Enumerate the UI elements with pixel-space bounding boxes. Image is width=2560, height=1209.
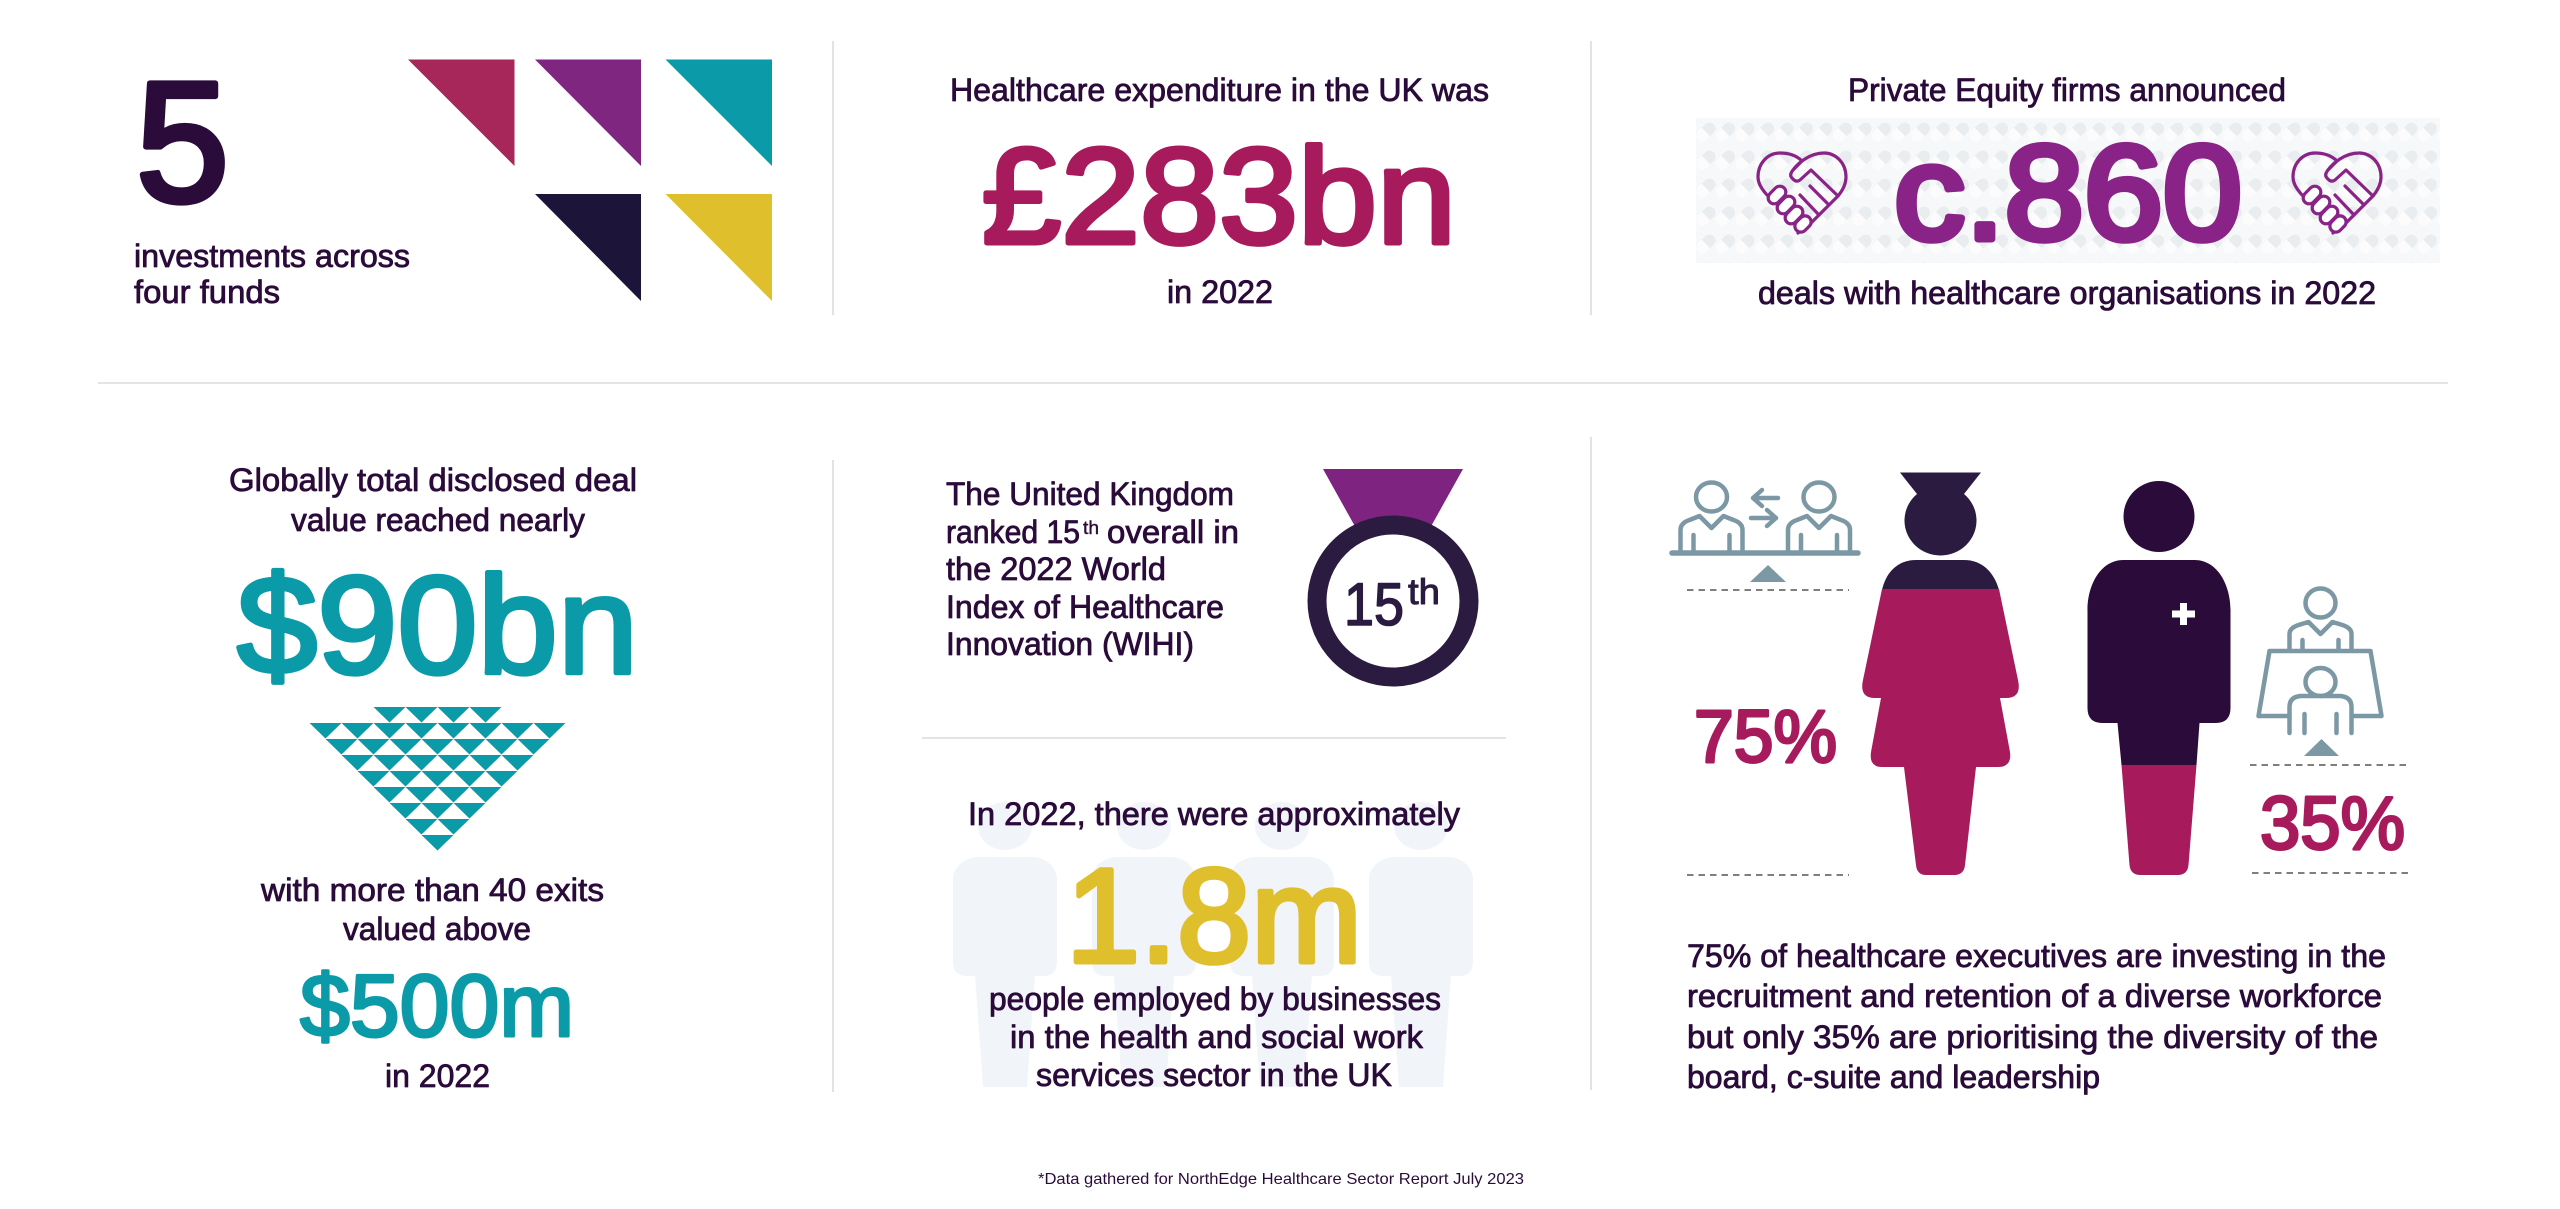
icon: left handshake heart	[1758, 153, 1846, 235]
icon: female figure	[1862, 472, 2019, 875]
icon: balance pointer right	[2304, 739, 2339, 756]
text: investments across four funds: four funds	[134, 274, 280, 310]
text: investments across four funds: investments across	[134, 238, 410, 274]
text: globally intro	[229, 462, 637, 538]
panel: WIHI ranking	[946, 469, 1469, 677]
text: people employed: people employed by businesses	[989, 981, 1441, 1017]
text: diversity paragraph: but only 35% are prioritising the diversity of the	[1687, 1019, 2378, 1055]
stat: £283bn: £283bn	[982, 120, 1456, 272]
icon: medal	[1317, 469, 1469, 677]
icon: background people silhouettes	[953, 802, 1473, 1087]
text: in 2022: in 2022	[385, 1058, 490, 1094]
footnote: *Data gathered for NorthEdge Healthcare Sector Report July 2023	[1038, 1171, 1524, 1188]
icon: medal: 15	[1344, 571, 1404, 638]
stat: $500m: $500m	[300, 956, 574, 1055]
text: UK ranking: The United Kingdom	[946, 476, 1234, 512]
text: deals with healthcare organisations: deals with healthcare organisations in 2022	[1758, 275, 2376, 311]
text: people employed: in the health and social work	[1010, 1019, 1424, 1055]
text: more than 40 exits	[260, 872, 604, 947]
panel: people employed	[953, 796, 1473, 1093]
panel: private equity deals	[1696, 72, 2440, 311]
text: UK ranking: Innovation (WIHI)	[946, 626, 1194, 662]
text: people employed	[989, 981, 1441, 1093]
icon: two people across boardroom table	[2258, 588, 2382, 733]
panel: workforce diversity	[1672, 472, 2412, 1095]
panel: global deal value	[229, 462, 638, 1094]
stat: $90bn: $90bn	[237, 548, 638, 703]
text: in 2022: in 2022	[1167, 274, 1273, 310]
panel: 5 investments	[134, 47, 772, 310]
icon: five coloured triangles	[408, 60, 772, 301]
text: people employed: services sector in the UK	[1036, 1057, 1392, 1093]
text: diversity paragraph: 75% of healthcare executives are investing in the	[1687, 938, 2386, 974]
stat: 1.8m: 1.8m	[1066, 842, 1362, 991]
text: globally intro: Globally total disclosed deal	[229, 462, 637, 498]
text: more than 40 exits: valued above	[343, 911, 531, 947]
text: expenditure intro: Healthcare expenditure in the UK was	[950, 72, 1489, 108]
stat: 5: 5	[136, 47, 229, 238]
stat: 35%: 35%	[2260, 781, 2405, 865]
icon: inverted triangle mosaic	[310, 707, 566, 850]
icon: medal: th	[1408, 571, 1440, 612]
text: UK ranking: the 2022 World	[946, 551, 1166, 587]
panel: UK healthcare expenditure	[950, 72, 1489, 310]
text: diversity paragraph: recruitment and retention of a diverse workforce	[1687, 978, 2382, 1014]
text: globally intro: value reached nearly	[291, 502, 585, 538]
text: employment intro: In 2022, there were approximately	[968, 796, 1460, 832]
text: UK ranking: ranked 15	[946, 514, 1080, 550]
stat: 75%: 75%	[1694, 695, 1837, 778]
text: diversity paragraph: board, c-suite and leadership	[1687, 1059, 2100, 1095]
stat: c.860: c.860	[1894, 119, 2242, 268]
text: diversity paragraph	[1687, 938, 2386, 1095]
text: investments across four funds	[134, 238, 410, 310]
text: UK ranking: overall in	[1107, 514, 1239, 550]
text: more than 40 exits: with more than 40 exits	[260, 872, 604, 908]
icon: balance pointer left	[1750, 565, 1786, 582]
text: UK ranking	[946, 476, 1239, 662]
icon: male figure	[2088, 481, 2230, 875]
text: UK ranking: Index of Healthcare	[946, 589, 1224, 625]
text: UK ranking: th	[1083, 518, 1099, 538]
icon: right handshake heart	[2293, 153, 2381, 235]
icon: two people at table with arrows	[1672, 482, 1858, 553]
background: patterned band	[1696, 118, 2440, 263]
text: private equity intro: Private Equity firms announced	[1848, 72, 2286, 108]
